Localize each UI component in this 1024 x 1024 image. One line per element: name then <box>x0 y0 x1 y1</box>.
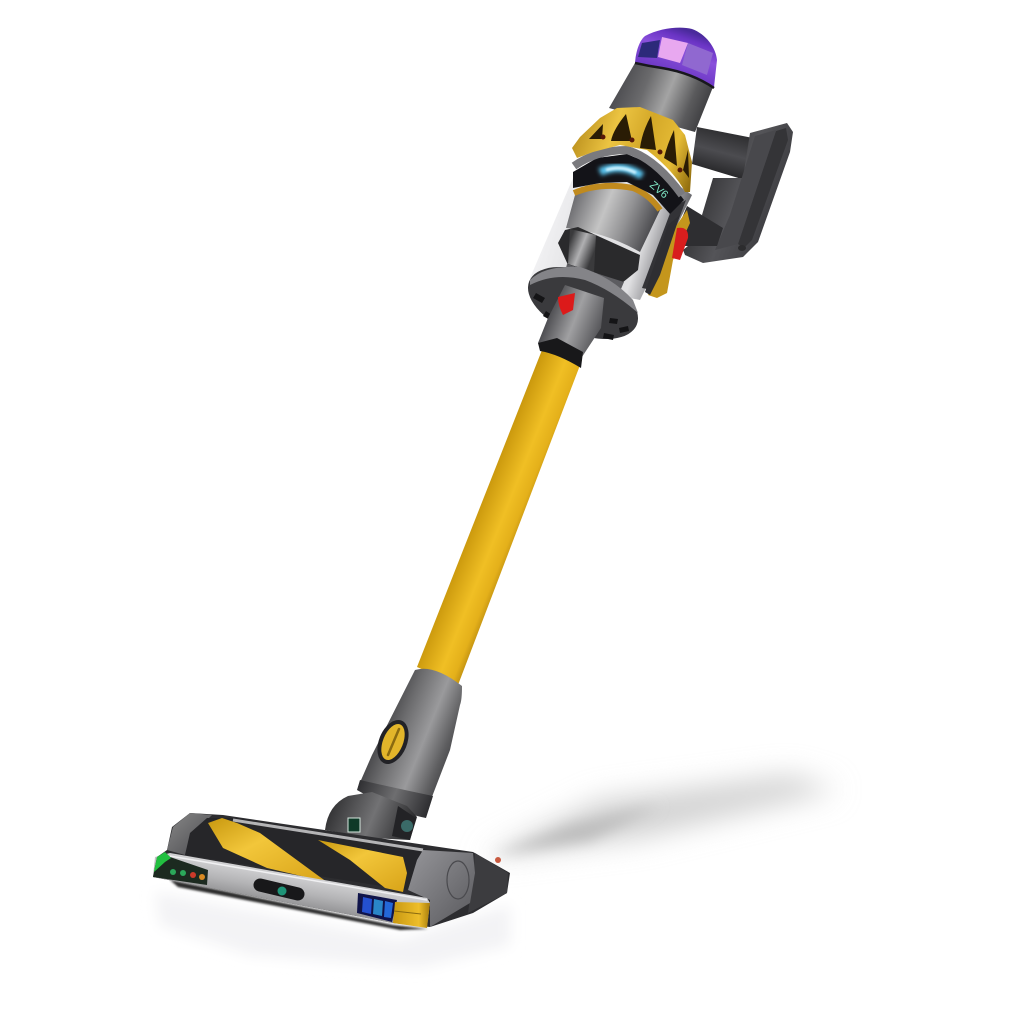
wand neck <box>538 285 604 368</box>
collar vents <box>589 114 689 178</box>
gold cyclone collar <box>572 107 692 192</box>
status panel <box>153 852 208 885</box>
head body <box>153 813 510 927</box>
pivot joint <box>325 792 417 840</box>
collar rivets <box>600 134 682 172</box>
display readout: ZV6 <box>647 179 670 201</box>
release button <box>558 293 575 315</box>
filter window <box>658 37 688 63</box>
gold release button <box>371 715 415 769</box>
underside shadow <box>170 880 428 930</box>
dark inner panel <box>642 200 686 290</box>
floor reflection <box>155 892 510 968</box>
dark funnel <box>558 227 640 283</box>
inner silver cylinder <box>566 185 660 252</box>
plate bolts <box>533 293 629 340</box>
bin base plate <box>518 253 648 353</box>
connector skirt <box>357 780 433 818</box>
display glow <box>600 168 642 176</box>
cyclone display band <box>573 150 684 214</box>
purple filter cap <box>635 28 717 88</box>
blue indicator panel <box>357 893 397 922</box>
clear dust bin <box>530 165 692 300</box>
motor housing <box>609 50 713 132</box>
right end cap <box>408 850 475 927</box>
top highlight <box>233 820 423 850</box>
silver rim <box>574 150 682 195</box>
sliding switch <box>260 885 298 894</box>
lower handle arm <box>682 206 723 246</box>
gold stripe one <box>208 818 327 882</box>
battery pack <box>683 123 793 263</box>
gold clip and red trigger <box>645 210 690 298</box>
pivot badge <box>348 818 360 832</box>
rear wedge <box>468 853 508 913</box>
left end cap <box>167 813 212 855</box>
lower wand connector <box>357 669 462 818</box>
handle arm <box>692 127 753 180</box>
orange ring <box>574 186 660 210</box>
floor shadow <box>480 775 838 858</box>
gold wand <box>417 350 582 685</box>
gold corner tip <box>393 902 430 928</box>
cleaner head <box>153 813 510 930</box>
brush roller <box>185 818 427 890</box>
front silver bar <box>153 853 430 927</box>
pivot arm and screw <box>392 806 416 840</box>
gold stripe two <box>318 840 407 892</box>
handle and battery pack <box>682 123 793 263</box>
